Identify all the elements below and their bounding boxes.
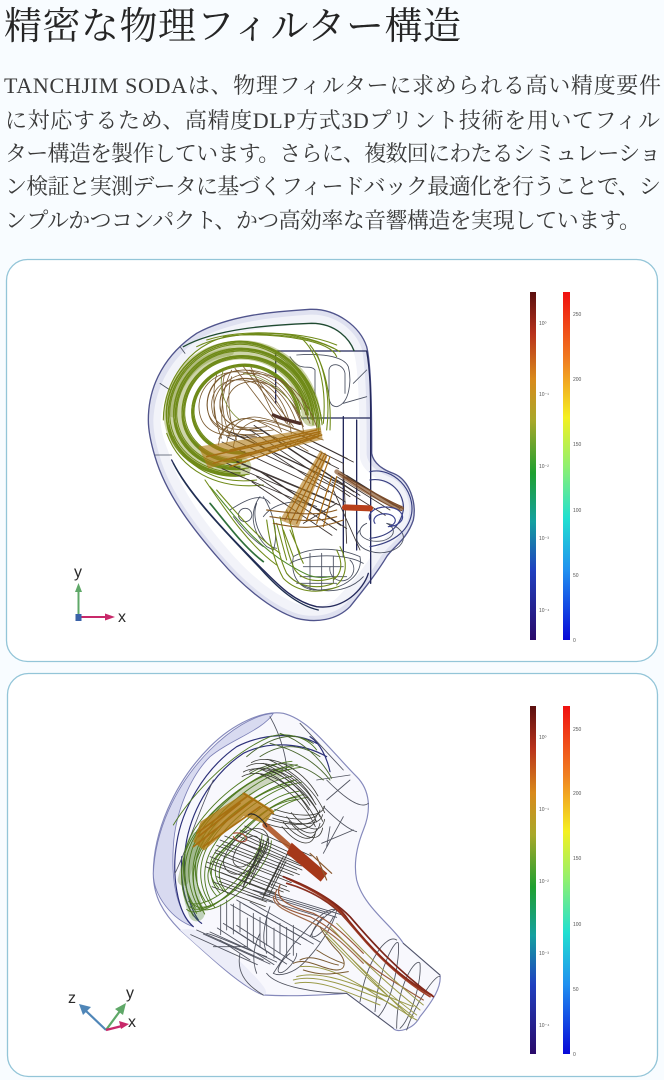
colour bar: vorticity scale: 10⁰ [539,735,547,741]
colour bar: speed scale [563,292,582,644]
wireframe chassis [175,717,440,1030]
streamlines: green ring [173,350,312,467]
dark blue shell contours [175,736,330,927]
nozzle streamlines [273,877,433,1000]
axis icon: x y z [68,985,136,1031]
colour bar: vorticity scale: 10⁻³ [539,536,549,542]
colour bar: vorticity scale: 10⁻⁴ [539,1023,549,1029]
colour bar: speed scale: 200 [573,791,582,797]
body text: に対応するため、高精度DLP方式3Dプリント技術を用いてフィル [5,108,660,133]
earphone streamline diagram: top view [148,309,414,621]
body text: ンプルかつコンパクト、かつ高効率な音響構造を実現しています。 [5,208,641,233]
colour bar: speed scale: 150 [573,442,582,448]
colour bar: speed scale: 250 [573,727,582,733]
colour bar: speed scale: 0 [573,638,576,644]
colour bar: vorticity scale: 10⁻¹ [539,392,549,398]
colour bar: speed scale: 250 [573,312,582,318]
body text [4,73,661,233]
colour bar: speed scale: 50 [573,573,579,579]
title: 精密な物理フィルター構造 [4,6,461,48]
red streamlines [265,825,322,875]
streamlines: dark hatch [222,425,400,550]
colour bar: speed scale [563,706,582,1058]
axis icon: x y: y [74,564,82,581]
colour bar: speed scale: 0 [573,1052,576,1058]
colour bar: vorticity scale: 10⁻² [539,464,549,470]
outer dark contour [172,323,371,610]
panel: top view simulation [6,260,658,662]
axis icon: x y z: y [126,985,134,1002]
colour bar: vorticity scale [530,706,549,1054]
colour bar: speed scale: 200 [573,377,582,383]
green streamlines [183,773,277,880]
dark hatch streamlines [205,759,325,907]
body text: TANCHJIM SODAは、物理フィルターに求められる高い精度要件 [4,73,661,98]
axis icon: x y z: z [68,990,76,1007]
colour bar: vorticity scale: 10⁻¹ [539,807,549,813]
colour bar: speed scale: 50 [573,987,579,993]
colour bar: speed scale: 100 [573,508,582,514]
colour bar: vorticity scale: 10⁻³ [539,951,549,957]
colour bar: vorticity scale: 10⁰ [539,321,547,327]
axis icon: x y [74,564,126,626]
body text: ター構造を製作しています。さらに、複数回にわたるシミュレーショ [5,141,661,166]
colour bar: vorticity scale [530,292,549,640]
axis icon: x y: x [118,609,126,626]
streamlines: brown inner [199,360,323,458]
streamlines: orange bands [198,427,323,468]
body text: ン検証と実測データに基づくフィードバック最適化を行うことで、シ [5,174,661,199]
axis icon: x y z: x [128,1014,136,1031]
colour bar: speed scale: 150 [573,856,582,862]
colour bar: speed scale: 100 [573,922,582,928]
panel: angled view simulation [8,674,658,1076]
orange streamlines [193,793,274,851]
colour bar: vorticity scale: 10⁻² [539,879,549,885]
earphone streamline diagram: angled view [153,713,440,1031]
colour bar: vorticity scale: 10⁻⁴ [539,608,549,614]
